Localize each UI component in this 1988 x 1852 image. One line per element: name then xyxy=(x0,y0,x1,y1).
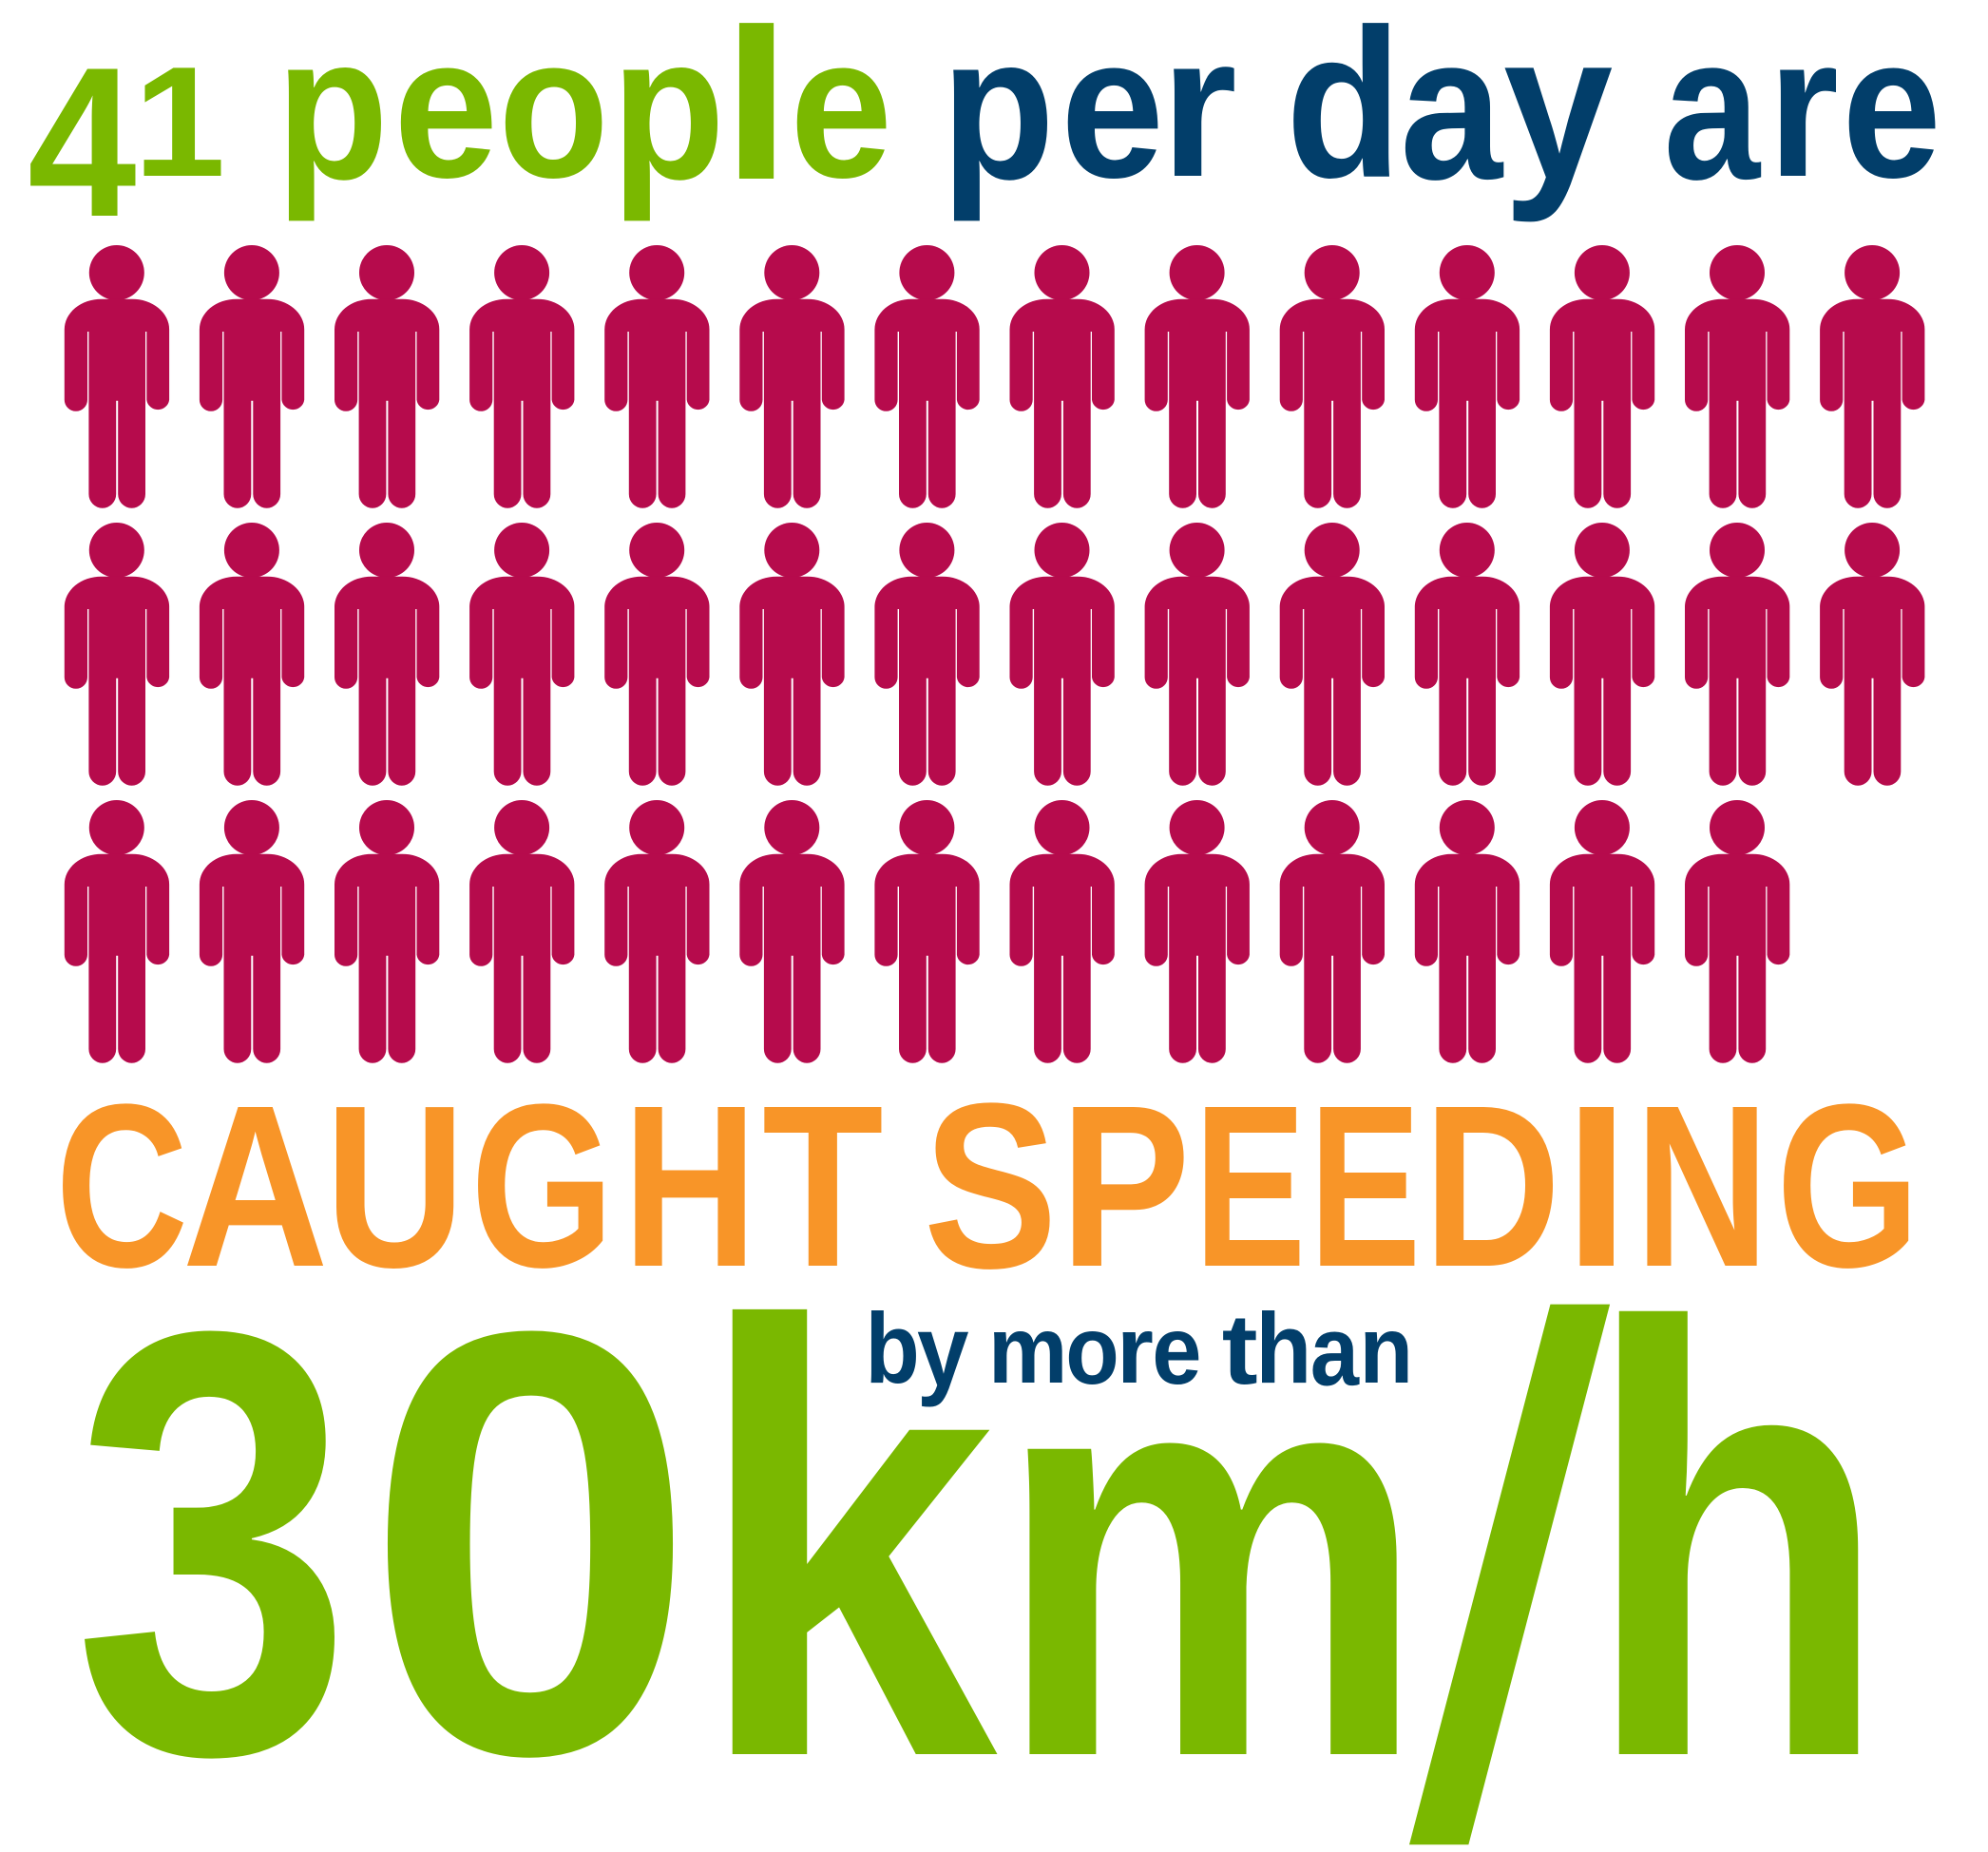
heading: CAUGHT SPEEDING: C xyxy=(55,1056,188,1316)
title: 41 people per day are xyxy=(28,0,1941,261)
text: by more than: o xyxy=(1065,1296,1119,1404)
title part: 41 people: o xyxy=(498,0,609,220)
title part: 41 people: e xyxy=(790,0,892,220)
heading: CAUGHT SPEEDING: D xyxy=(1424,1059,1560,1315)
text: by more than: e xyxy=(1152,1295,1201,1404)
heading: CAUGHT SPEEDING: A xyxy=(182,1058,329,1315)
title part: per day are xyxy=(941,0,1941,223)
icon row 3 xyxy=(65,800,1789,1063)
title part: 41 people: e xyxy=(393,0,498,220)
heading: CAUGHT SPEEDING: E xyxy=(1309,1057,1421,1314)
heading: CAUGHT SPEEDING: G xyxy=(470,1056,614,1316)
heading: CAUGHT SPEEDING: T xyxy=(762,1057,884,1314)
text: by more than: b xyxy=(865,1293,920,1404)
text: by more than: h xyxy=(1255,1294,1311,1404)
text: by more than: y xyxy=(917,1294,969,1408)
title part: per day are: a xyxy=(1664,0,1762,222)
title part: 41 people: 1 xyxy=(134,33,225,209)
heading: CAUGHT SPEEDING: G xyxy=(1776,1056,1920,1316)
heading: CAUGHT SPEEDING: S xyxy=(924,1054,1058,1317)
title part: 41 people xyxy=(28,0,892,261)
text: by more than: m xyxy=(988,1296,1067,1403)
pictogram: 41 people icons xyxy=(65,245,1924,1063)
title part: 41 people: 4 xyxy=(28,23,137,261)
text: by more than: t xyxy=(1222,1294,1258,1405)
title part: per day are: r xyxy=(1768,0,1839,219)
heading: CAUGHT SPEEDING xyxy=(55,1054,1920,1317)
big figure: 30km/h xyxy=(73,1174,1889,1852)
title part: per day are: r xyxy=(1161,0,1237,220)
icon row 2 xyxy=(65,523,1924,786)
heading: CAUGHT SPEEDING: U xyxy=(325,1057,466,1316)
heading: CAUGHT SPEEDING: P xyxy=(1061,1057,1191,1315)
title part: per day are: e xyxy=(1842,0,1941,220)
text: by more than xyxy=(865,1293,1413,1408)
text: by more than: n xyxy=(1359,1298,1413,1403)
title part: per day are: e xyxy=(1061,0,1164,220)
heading: CAUGHT SPEEDING: E xyxy=(1194,1057,1306,1314)
heading: CAUGHT SPEEDING: I xyxy=(1564,1058,1629,1315)
text: by more than: r xyxy=(1117,1297,1154,1403)
text: by more than: a xyxy=(1310,1295,1360,1406)
heading: CAUGHT SPEEDING: N xyxy=(1634,1057,1769,1315)
icon row 1 xyxy=(65,245,1924,508)
heading: CAUGHT SPEEDING: H xyxy=(622,1057,757,1315)
